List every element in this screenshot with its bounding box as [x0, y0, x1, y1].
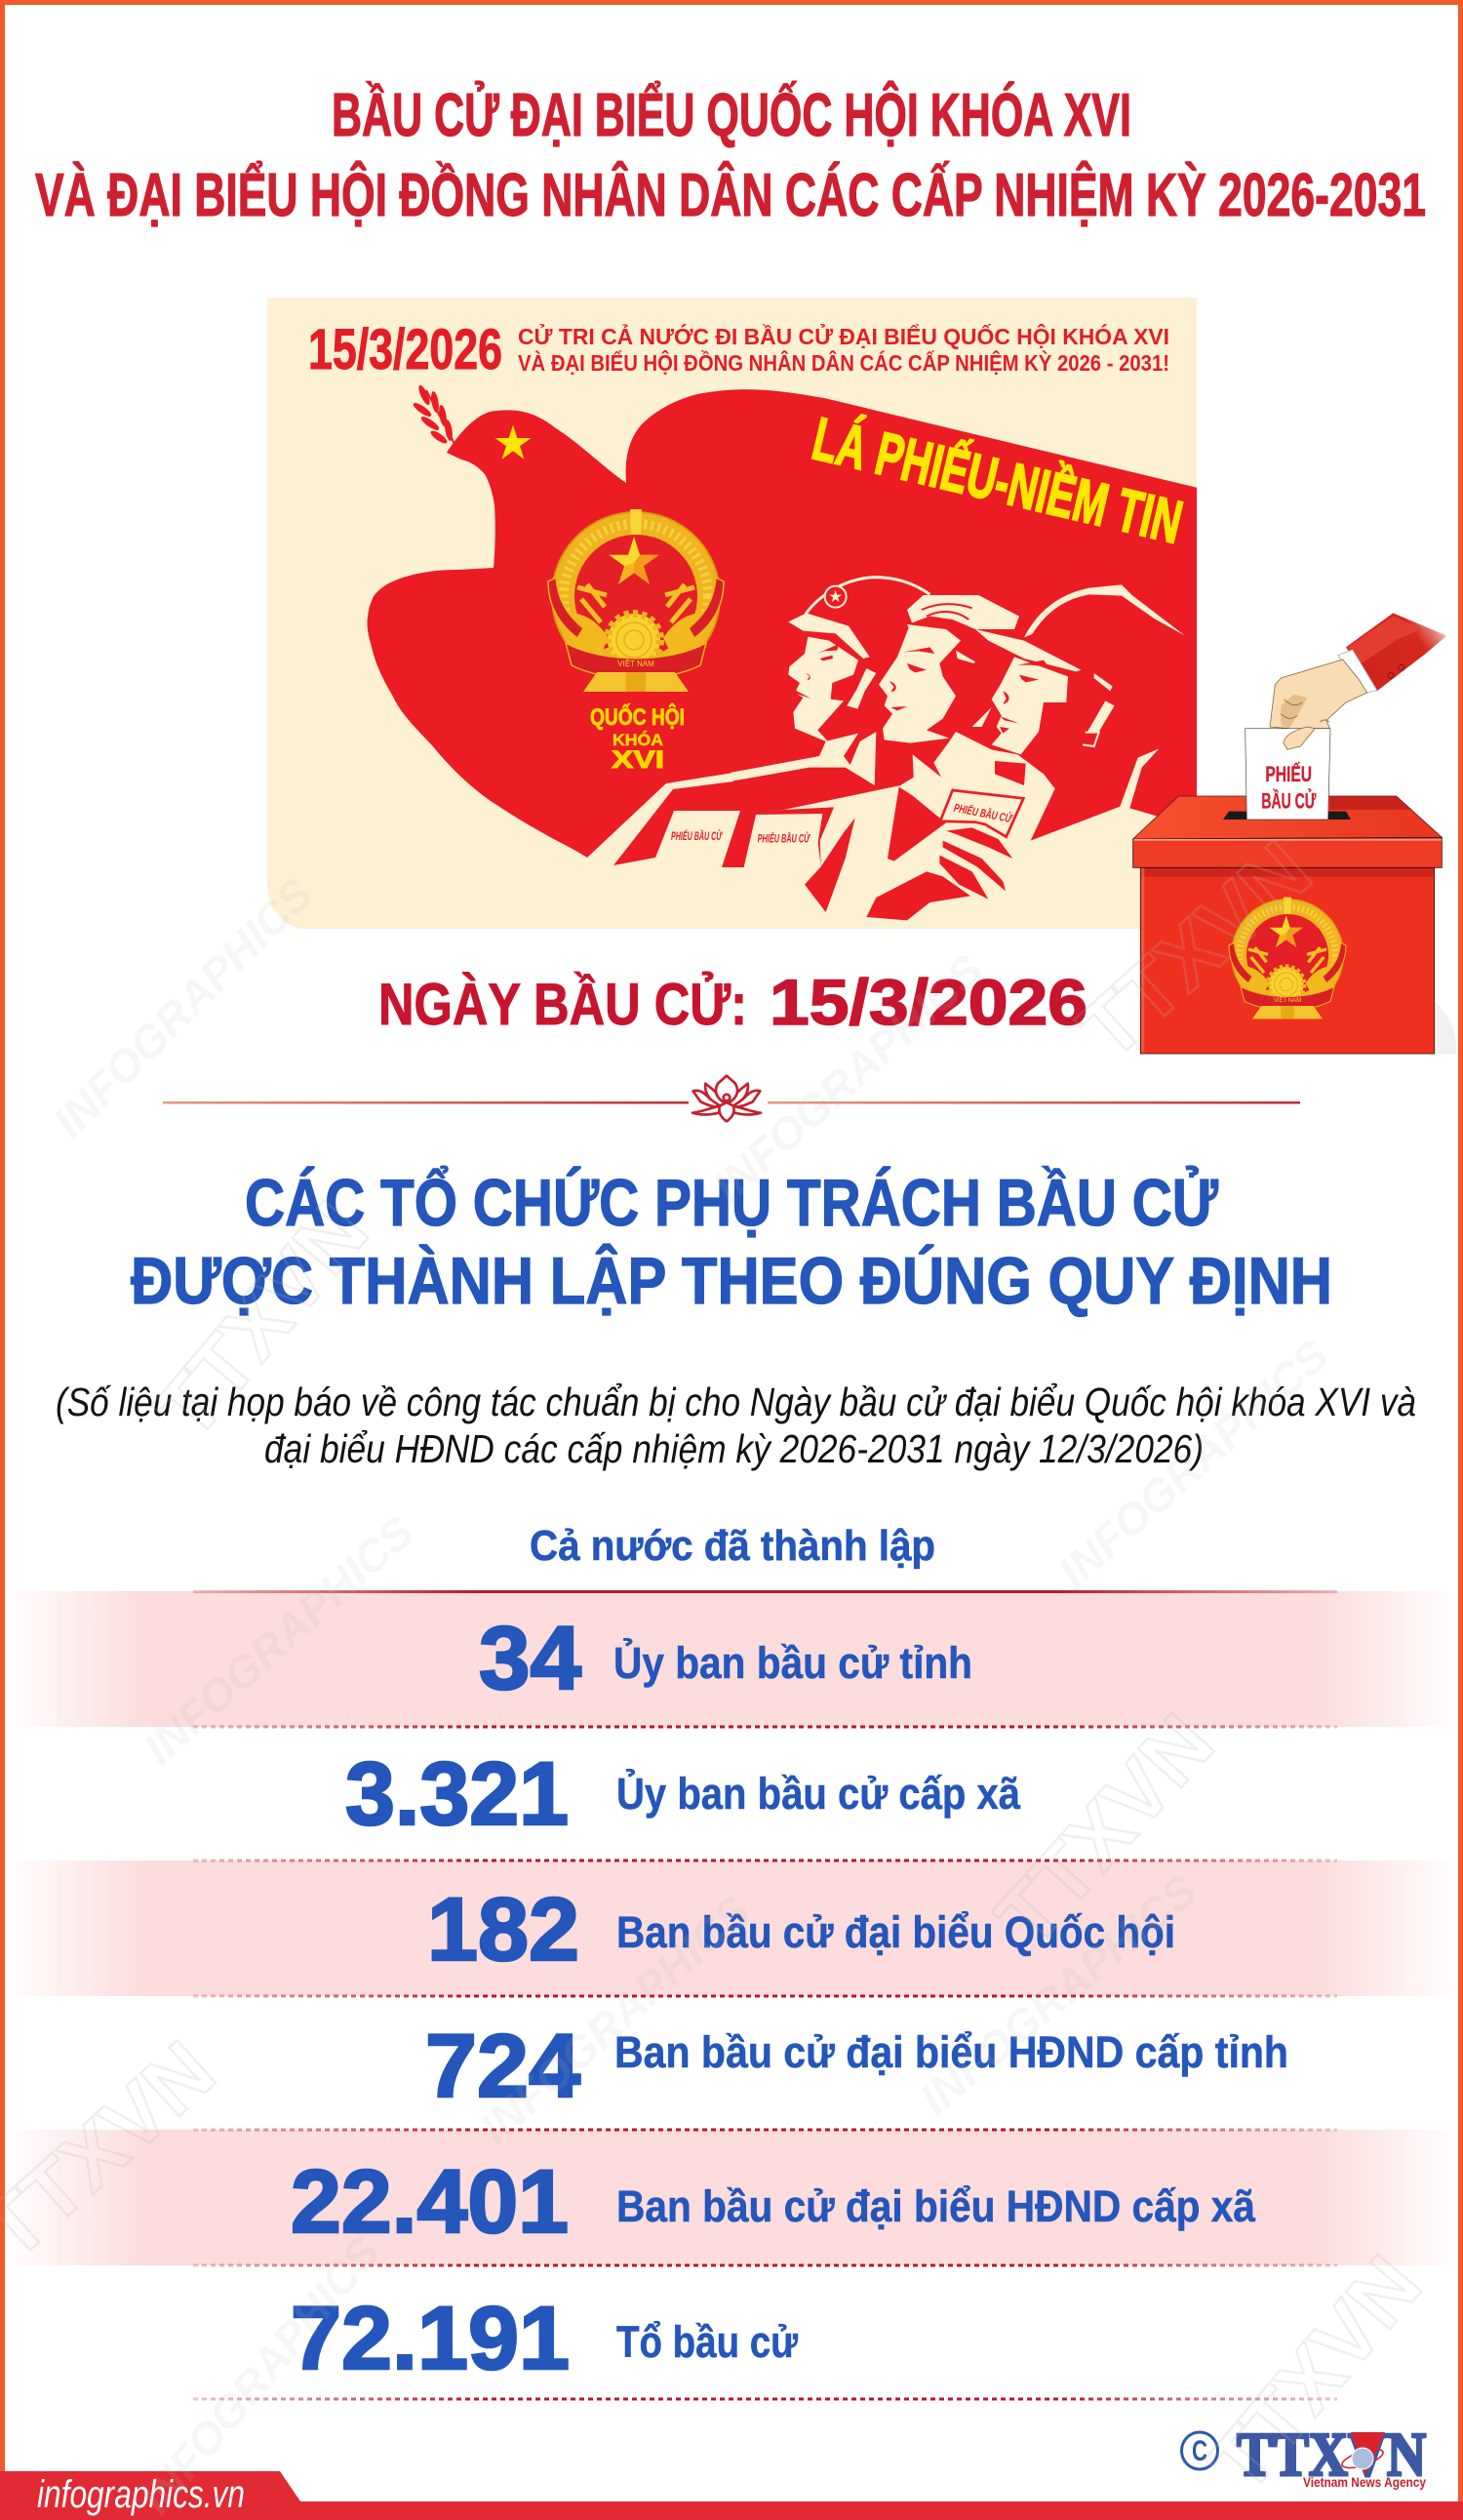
table of counts	[5, 1591, 1458, 2399]
row: 34: 34	[479, 1609, 581, 1708]
icon: lotus	[692, 1076, 761, 1121]
poster headline: VÀ ĐẠI BIỂU HỘI ĐỒNG NHÂN DÂN CÁC CẤP NHIỆM KỲ 2026 - 2031!	[518, 349, 1169, 376]
emblem caption: QUỐC HỘI	[590, 703, 685, 731]
box body	[1140, 867, 1435, 1054]
hand	[1270, 660, 1367, 749]
poster headline	[310, 324, 1168, 375]
red folds	[756, 807, 834, 866]
three figures	[732, 578, 1203, 937]
dove star	[494, 425, 532, 460]
first ballot text: PHIẾU BẦU CỬ	[671, 828, 723, 843]
lid top	[1133, 796, 1442, 839]
divider with lotus	[163, 1076, 1300, 1121]
row: 72.191: 72.191	[291, 2289, 570, 2388]
election date: 15/3/2026	[770, 966, 1087, 1038]
watermarks: TTXVN	[1191, 2239, 1440, 2509]
section heading	[131, 1165, 1332, 1318]
emblem caption	[590, 703, 685, 774]
footer site name: infographics.vn	[37, 2473, 245, 2516]
row: 724: Ban bầu cử đại biểu HĐND cấp tỉnh	[614, 2027, 1288, 2077]
helmet three	[975, 629, 1081, 671]
slogan: LÁ PHIẾU-NIỀM TIN	[807, 405, 1188, 557]
source note: đại biểu HĐND các cấp nhiệm kỳ 2026-2031 ngày 12/3/2026)	[264, 1426, 1204, 1471]
row: 182: 182	[427, 1880, 579, 1980]
row: 182	[427, 1880, 1175, 1980]
body	[743, 732, 1159, 868]
row: 182: Ban bầu cử đại biểu Quốc hội	[616, 1907, 1175, 1957]
watermarks: INFOGRAPHICS	[134, 1506, 423, 1774]
election date: NGÀY BẦU CỬ:	[378, 972, 747, 1037]
ballot label: PHIẾU	[1265, 762, 1312, 786]
three figures: PHIẾU BẦU CỬ	[758, 830, 811, 845]
card	[940, 790, 1023, 837]
watermarks: INFOGRAPHICS	[1048, 1330, 1338, 1597]
dove silhouette	[367, 389, 1198, 868]
poster illustration	[267, 298, 1203, 937]
row: 3.321: Ủy ban bầu cử cấp xã	[616, 1769, 1021, 1819]
poster headline: CỬ TRI CẢ NƯỚC ĐI BẦU CỬ ĐẠI BIỂU QUỐC HỘI KHÓA XVI	[518, 322, 1169, 349]
row: 724: 724	[425, 2017, 580, 2116]
title: BẦU CỬ ĐẠI BIỂU QUỐC HỘI KHÓA XVI	[332, 82, 1131, 149]
watermarks	[0, 823, 1440, 2520]
poster headline: 15/3/2026	[308, 318, 502, 381]
helmet one	[788, 613, 870, 659]
ballot paper	[1246, 729, 1330, 820]
row: 34	[479, 1609, 972, 1708]
watermarks: TTXVN	[1061, 823, 1328, 1077]
watermarks: TTXVN	[978, 1697, 1232, 1964]
emblem on box	[1229, 898, 1346, 1019]
logo: TTXVN: TTXVN	[1237, 2420, 1426, 2489]
sleeve	[1346, 613, 1446, 691]
face two	[879, 624, 961, 743]
row: 22.401	[291, 2152, 1256, 2252]
emblem caption: XVI	[612, 746, 664, 774]
section heading: CÁC TỔ CHỨC PHỤ TRÁCH BẦU CỬ	[245, 1165, 1218, 1240]
logo: TTXVN: C	[1192, 2435, 1207, 2467]
source note	[56, 1380, 1416, 1471]
logo: TTXVN: Vietnam News Agency	[1303, 2475, 1426, 2490]
logo: TTXVN	[1182, 2420, 1426, 2490]
box shadow	[1435, 1002, 1456, 1054]
row: 724	[425, 2017, 1288, 2116]
row: 34: Ủy ban bầu cử tỉnh	[613, 1638, 972, 1688]
row: 3.321	[345, 1744, 1021, 1844]
row: 72.191: Tổ bầu cử	[616, 2317, 798, 2367]
olive branch	[414, 384, 455, 443]
emblem on box: VIỆT NAM	[1274, 996, 1301, 1004]
ballot box with hand	[1133, 613, 1456, 1054]
table heading: Cả nước đã thành lập	[530, 1522, 935, 1570]
row: 3.321: 3.321	[345, 1744, 569, 1844]
watermarks: INFOGRAPHICS	[910, 1864, 1206, 2125]
watermarks: INFOGRAPHICS	[43, 868, 323, 1147]
watermarks: INFOGRAPHICS	[130, 2227, 390, 2520]
watermarks: TTXVN	[138, 1185, 386, 1456]
election date	[378, 966, 1087, 1038]
section heading: ĐƯỢC THÀNH LẬP THEO ĐÚNG QUY ĐỊNH	[131, 1243, 1332, 1318]
emblem caption: KHÓA	[613, 731, 663, 749]
watermarks: INFOGRAPHICS	[703, 944, 993, 1212]
row: 72.191	[291, 2289, 798, 2388]
watermarks: INFOGRAPHICS	[470, 1886, 760, 2153]
face three	[992, 657, 1068, 754]
national emblem on poster	[548, 509, 724, 692]
footer band	[0, 2471, 1463, 2520]
separators	[193, 1592, 1337, 2399]
band rows	[5, 1591, 1458, 2265]
ballot label: BẦU CỬ	[1261, 788, 1317, 813]
lid front	[1133, 837, 1442, 867]
shoulder strip	[666, 773, 733, 789]
slot	[1223, 812, 1351, 820]
face one	[732, 637, 876, 785]
cuff	[1338, 650, 1377, 694]
national emblem on poster: VIỆT NAM	[617, 660, 654, 668]
row: 22.401: 22.401	[291, 2152, 569, 2252]
ballot label	[1261, 762, 1317, 813]
row: 22.401: Ban bầu cử đại biểu HĐND cấp xã	[616, 2181, 1256, 2231]
title	[35, 82, 1426, 229]
three figures: PHIẾU BẦU CỬ	[953, 800, 1014, 825]
